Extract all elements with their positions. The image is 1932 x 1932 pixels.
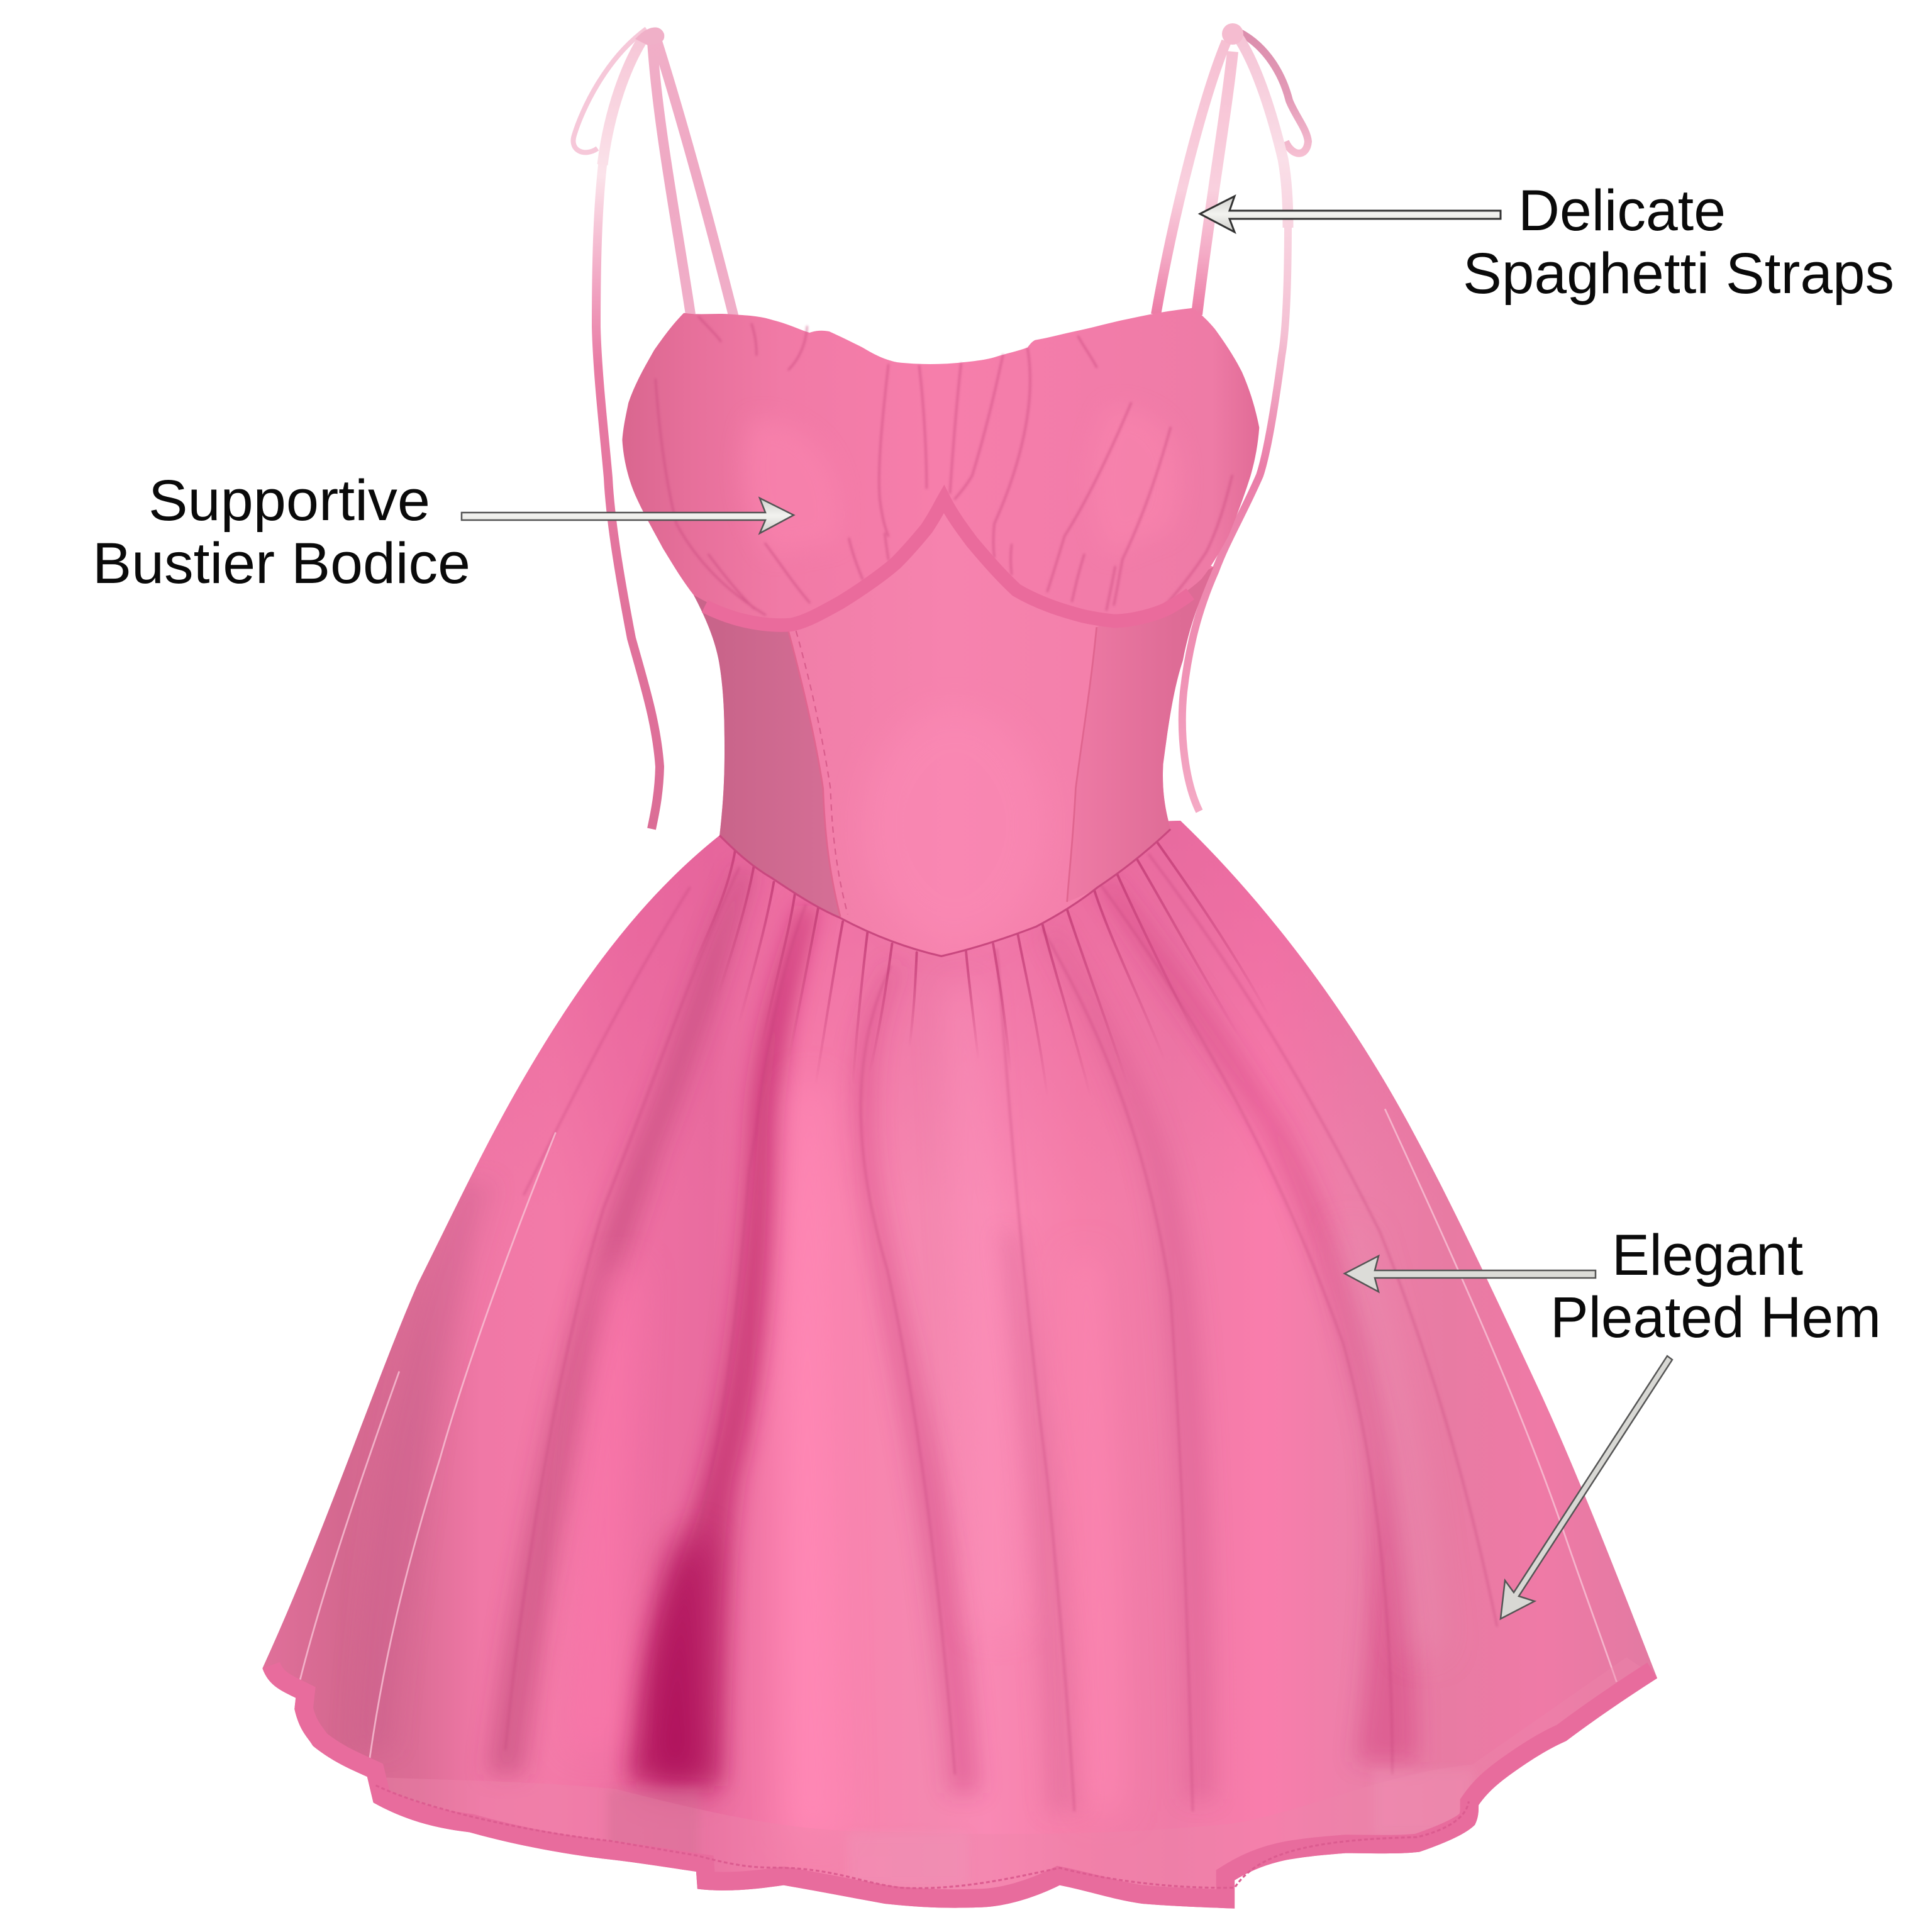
- hem stitching: [376, 1785, 1468, 1888]
- arrow: to bodice: [462, 498, 794, 533]
- gathered bust cups: [622, 308, 1259, 625]
- callout: supportive bustier bodice: [92, 469, 794, 596]
- bust highlights: [743, 407, 1180, 555]
- corset left panel: [694, 595, 840, 918]
- corset highlight: [862, 709, 1047, 943]
- skirt hem band: [262, 1668, 1657, 1909]
- arrow: to hem: [1501, 1356, 1672, 1619]
- label: delicate spaghetti straps: Delicate: [1518, 179, 1726, 243]
- skirt gathers at waist: [704, 841, 1254, 1073]
- left strap and tie: [573, 28, 734, 829]
- label: delicate spaghetti straps: Spaghetti Straps: [1463, 242, 1894, 306]
- label: supportive bustier bodice: Bustier Bodice: [92, 531, 470, 596]
- label: delicate spaghetti straps: [1463, 179, 1894, 306]
- corset right panel: [1067, 567, 1214, 902]
- waist seam: [719, 830, 1170, 956]
- bust underwire seam: [705, 499, 1191, 625]
- skirt: [262, 820, 1657, 1909]
- bust ruching folds: [655, 317, 1232, 615]
- callout: elegant pleated hem: [1345, 1223, 1881, 1619]
- label: elegant pleated hem: [1550, 1223, 1881, 1350]
- arrow: to straps: [1200, 196, 1501, 232]
- corset waist panel: [694, 487, 1214, 956]
- skirt folds: [424, 821, 1498, 1812]
- right strap and tie: [1156, 23, 1308, 811]
- label: supportive bustier bodice: [92, 469, 470, 596]
- label: elegant pleated hem: Pleated Hem: [1550, 1285, 1881, 1350]
- skirt fold lines: [505, 854, 1497, 1811]
- dress illustration: [262, 308, 1657, 1909]
- sheer hem panels: [340, 1667, 1618, 1908]
- label: elegant pleated hem: Elegant: [1612, 1223, 1803, 1287]
- callout: delicate spaghetti straps: [1200, 179, 1894, 306]
- corset seams: [787, 627, 1097, 917]
- skirt layer edges: [296, 1109, 1616, 1777]
- label: supportive bustier bodice: Supportive: [148, 469, 430, 533]
- skirt core shadow: [643, 1540, 708, 1787]
- arrow: to pleats: [1345, 1256, 1596, 1292]
